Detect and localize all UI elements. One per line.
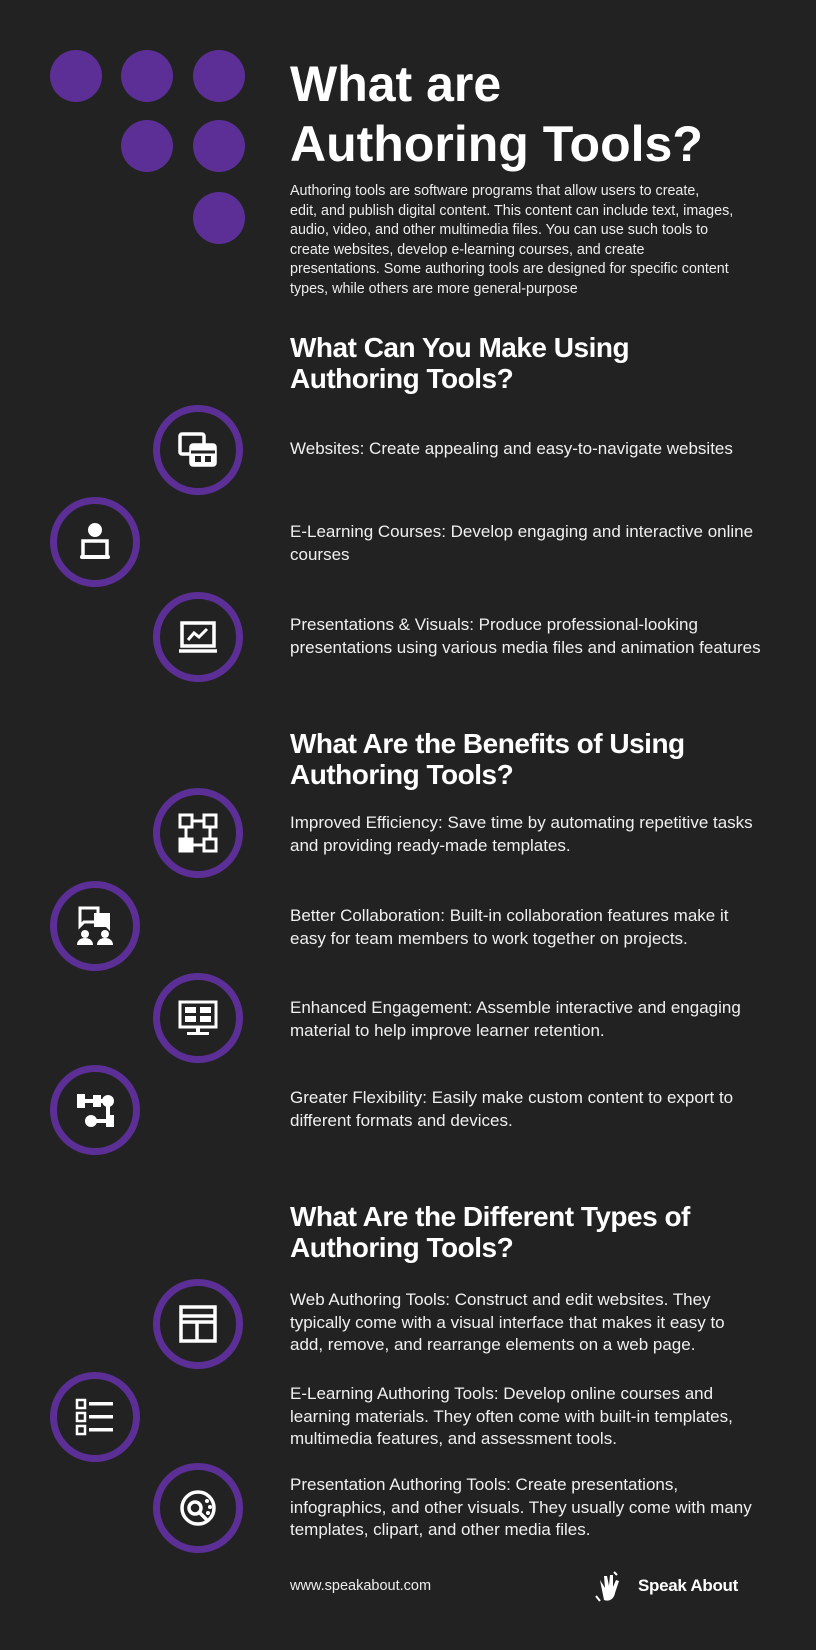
intro text: types, while others are more general-purpose — [290, 280, 578, 296]
heading: benefits: What Are the Benefits of Using — [290, 728, 685, 759]
text: web authoring: add, remove, and rearrange elements on a web page. — [290, 1335, 695, 1354]
text: web authoring — [290, 1290, 725, 1354]
text: efficiency: Improved Efficiency: Save time by automating repetitive tasks — [290, 813, 753, 832]
text: presentations — [290, 615, 761, 656]
text: websites: Websites: Create appealing and easy-to-navigate websites — [290, 439, 733, 458]
logo text: Speak About — [638, 1576, 738, 1595]
heading: benefits — [290, 728, 685, 790]
decorative dots — [50, 50, 245, 244]
intro text: audio, video, and other multimedia files. You can use such tools to — [290, 222, 708, 238]
title — [290, 56, 703, 172]
icon: presentation authoring — [153, 1463, 243, 1553]
text: e-learning: E-Learning Courses: Develop engaging and interactive online — [290, 522, 753, 541]
text: presentations: Presentations & Visuals: Produce professional-looking — [290, 615, 698, 634]
heading: types: Authoring Tools? — [290, 1232, 513, 1263]
icon: waving hand — [595, 1571, 619, 1602]
text: e-learning authoring: multimedia features, and assessment tools. — [290, 1429, 617, 1448]
footer url: www.speakabout.com — [290, 1578, 431, 1594]
intro text: edit, and publish digital content. This content can include text, images, — [290, 202, 733, 218]
text: presentation authoring — [290, 1475, 752, 1539]
heading: what can you make: Authoring Tools? — [290, 363, 513, 394]
icon: e-learning — [50, 497, 140, 587]
intro text: Authoring tools are software programs that allow users to create, — [290, 183, 699, 199]
icon: flexibility — [50, 1065, 140, 1155]
text: e-learning: courses — [290, 544, 350, 564]
text: efficiency — [290, 813, 753, 854]
text: e-learning authoring — [290, 1384, 733, 1448]
text: collaboration: easy for team members to work together on projects. — [290, 928, 688, 948]
text: e-learning authoring: learning materials. They often come with built-in templates, — [290, 1406, 733, 1426]
text: engagement: Enhanced Engagement: Assemble interactive and engaging — [290, 998, 741, 1017]
icon: web authoring — [153, 1279, 243, 1369]
heading: what can you make: What Can You Make Using — [290, 332, 629, 363]
text: flexibility — [290, 1088, 733, 1130]
text: presentation authoring: templates, clipart, and other media files. — [290, 1520, 590, 1539]
icon: websites — [153, 405, 243, 495]
icon: e-learning authoring — [50, 1372, 140, 1462]
text: flexibility: different formats and devices. — [290, 1110, 513, 1130]
text: flexibility: Greater Flexibility: Easily make custom content to export to — [290, 1088, 733, 1107]
text: efficiency: and providing ready-made templates. — [290, 836, 571, 854]
icon: engagement — [153, 973, 243, 1063]
title: What are — [290, 56, 501, 112]
heading: what can you make — [290, 332, 629, 394]
heading: benefits: Authoring Tools? — [290, 759, 513, 790]
intro text: presentations. Some authoring tools are designed for specific content — [290, 261, 729, 277]
heading: types — [290, 1201, 690, 1263]
footer logo — [595, 1571, 738, 1602]
text: presentation authoring: Presentation Authoring Tools: Create presentations, — [290, 1475, 678, 1494]
intro text — [290, 183, 733, 296]
text: collaboration — [290, 906, 728, 948]
heading: types: What Are the Different Types of — [290, 1201, 690, 1232]
text: engagement: material to help improve learner retention. — [290, 1020, 605, 1040]
text: web authoring: typically come with a visual interface that makes it easy to — [290, 1312, 725, 1332]
text: e-learning authoring: E-Learning Authoring Tools: Develop online courses and — [290, 1384, 713, 1403]
text: engagement — [290, 998, 741, 1040]
title: Authoring Tools? — [290, 116, 703, 172]
text: presentations: presentations using various media files and animation features — [290, 638, 761, 656]
icon: presentations — [153, 592, 243, 682]
intro text: create websites, develop e-learning courses, and create — [290, 242, 644, 258]
text: e-learning — [290, 522, 753, 564]
text: web authoring: Web Authoring Tools: Construct and edit websites. They — [290, 1290, 711, 1309]
icon: efficiency — [153, 788, 243, 878]
icon: collaboration — [50, 881, 140, 971]
text: presentation authoring: infographics, and other visuals. They usually come with many — [290, 1498, 752, 1516]
text: collaboration: Better Collaboration: Built-in collaboration features make it — [290, 906, 728, 925]
